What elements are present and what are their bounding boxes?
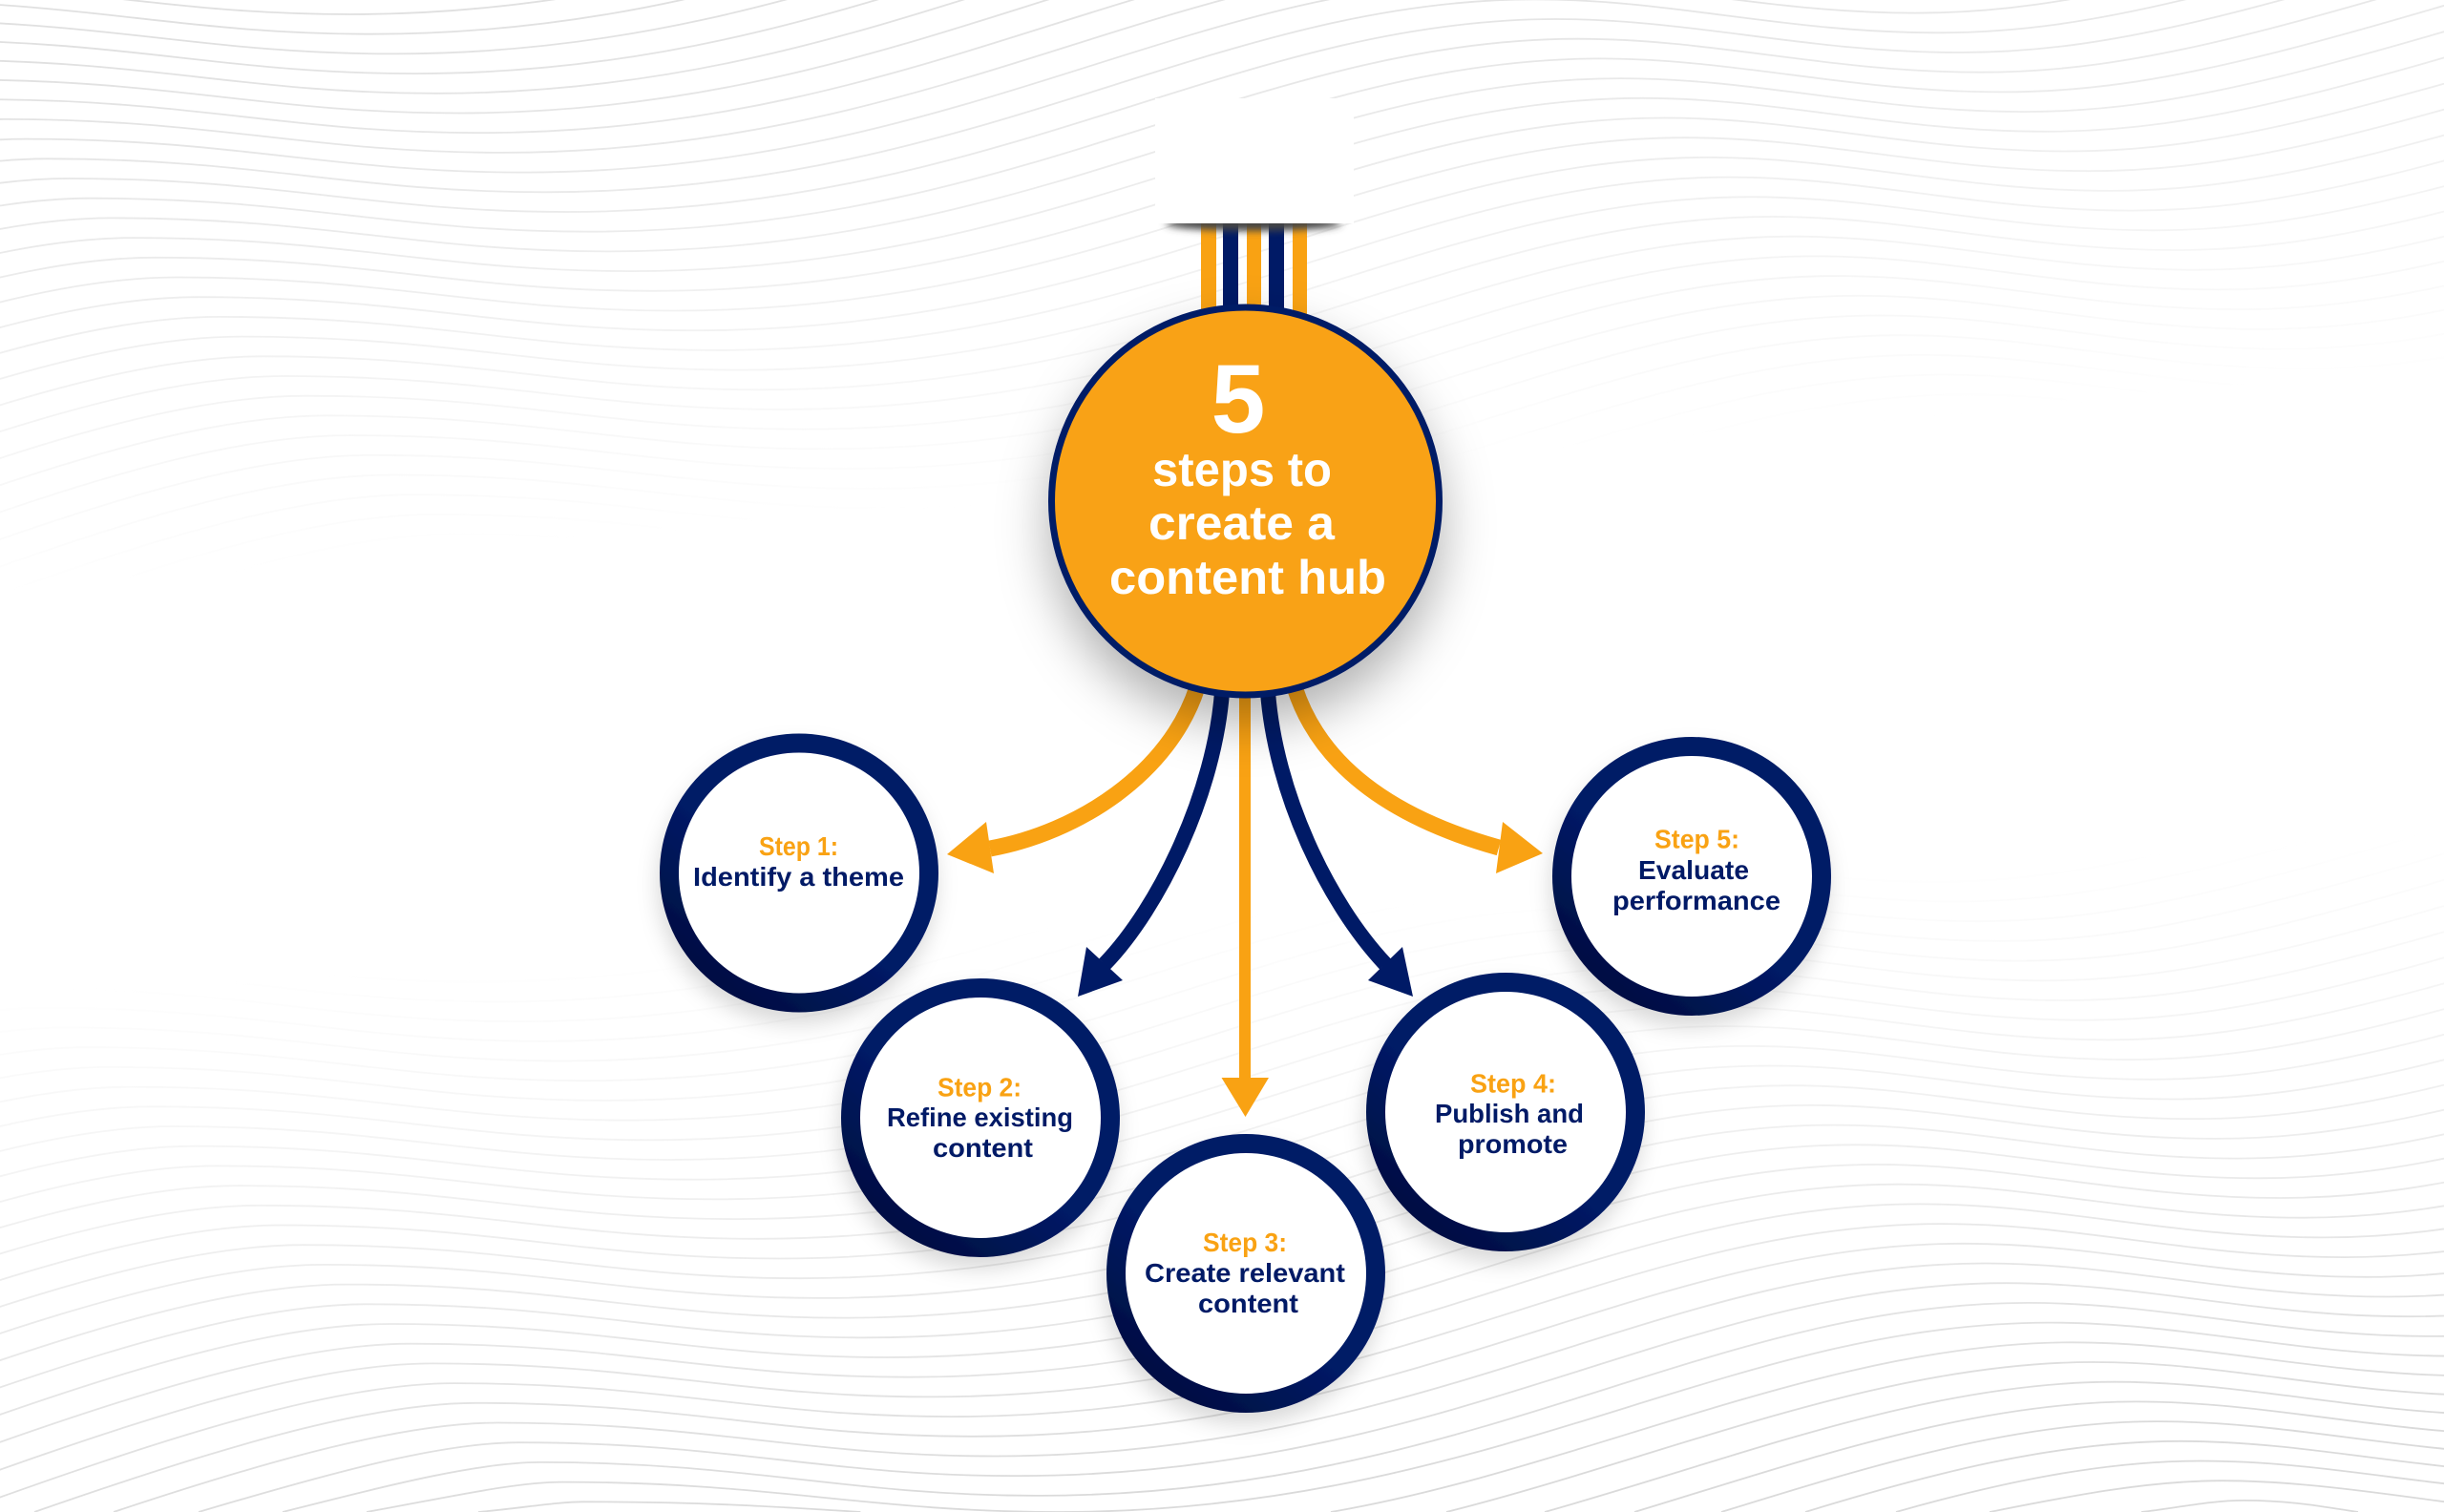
step 5 circle: performance (1612, 886, 1780, 915)
step 2 circle (851, 988, 1110, 1248)
arrow: to step 4 (1268, 692, 1413, 997)
step 3 circle: Create relevant (1145, 1258, 1345, 1288)
step 5 circle: Evaluate (1638, 855, 1749, 885)
step 2 circle: content (933, 1133, 1033, 1163)
step 3 circle: content (1198, 1289, 1298, 1318)
step 4 circle: promote (1458, 1129, 1568, 1159)
hub title text: steps to (1152, 443, 1332, 496)
arrow: to step 5 (1295, 687, 1543, 873)
step 1 circle: Step 1: (759, 831, 838, 861)
step 5 circle: Step 5: (1654, 825, 1739, 853)
hub title text: content hub (1109, 551, 1386, 604)
hub number: 5 (1211, 345, 1265, 453)
step 4 circle: Step 4: (1470, 1069, 1556, 1098)
step 2 circle: Step 2: (938, 1073, 1022, 1102)
step 4 circle: Publish and (1435, 1099, 1584, 1128)
step 3 circle: Step 3: (1203, 1228, 1287, 1257)
hub title text: create a (1148, 496, 1336, 550)
arrow: to step 3 (1222, 692, 1269, 1117)
step 3 circle (1116, 1144, 1376, 1403)
step 1 circle (669, 743, 929, 1002)
hub title text (1109, 443, 1386, 604)
step 4 circle (1376, 982, 1635, 1242)
arrow: to step 2 (1078, 692, 1222, 997)
step 2 circle: Refine existing (887, 1102, 1073, 1132)
arrow: to step 1 (947, 687, 1197, 873)
step 1 circle: Identify a theme (693, 862, 904, 892)
connector bars above hub (1201, 223, 1307, 314)
blank white header plate (1155, 98, 1354, 231)
step 5 circle (1562, 746, 1822, 1006)
hub circle: 5 steps to create a content hub (1052, 307, 1440, 695)
